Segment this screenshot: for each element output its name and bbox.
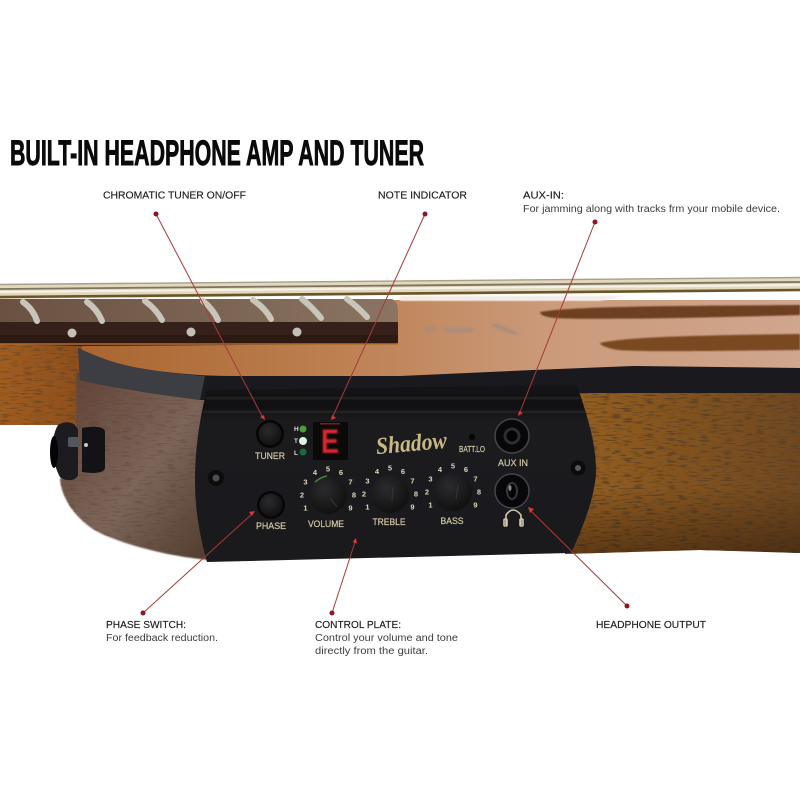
fretboard bbox=[0, 299, 398, 346]
phase button bbox=[256, 491, 286, 532]
treble knob: 5 bbox=[388, 464, 392, 472]
aux in jack: AUX IN bbox=[498, 458, 528, 469]
tuner LEDs bbox=[294, 426, 307, 457]
label: control plate: directly from the guitar. bbox=[315, 646, 428, 657]
treble knob: 4 bbox=[375, 467, 380, 476]
volume knob: 2 bbox=[300, 490, 304, 500]
screw right bbox=[570, 460, 586, 476]
bass knob: 6 bbox=[464, 465, 468, 474]
arrow: control plate bbox=[330, 538, 357, 616]
volume knob: 6 bbox=[339, 468, 343, 477]
title: BUILT-IN HEADPHONE AMP AND TUNER bbox=[10, 134, 424, 173]
treble knob: TREBLE bbox=[372, 517, 406, 528]
label: control plate: CONTROL PLATE: bbox=[315, 619, 401, 631]
label: phase switch: For feedback reduction. bbox=[106, 633, 218, 644]
label: control plate: Control your volume and tone bbox=[315, 633, 458, 644]
volume knob bbox=[300, 464, 356, 530]
volume knob: 8 bbox=[352, 490, 356, 500]
tuner LEDs: H bbox=[294, 426, 299, 433]
tuner button: TUNER bbox=[255, 451, 285, 462]
label: phase switch bbox=[106, 619, 218, 644]
label: aux in: AUX-IN: bbox=[523, 190, 564, 202]
volume knob: 7 bbox=[348, 478, 353, 486]
guitar photograph bbox=[0, 277, 800, 560]
panel: control plate bbox=[195, 385, 596, 562]
icon: headphones bbox=[504, 510, 523, 526]
bass knob: 3 bbox=[428, 474, 433, 484]
bass knob bbox=[425, 462, 481, 527]
walnut side wood bbox=[60, 372, 210, 560]
label: aux in: For jamming along with tracks frm your mobile device. bbox=[523, 204, 780, 215]
volume knob: VOLUME bbox=[308, 519, 344, 530]
note display bbox=[313, 422, 348, 461]
volume knob: 3 bbox=[303, 478, 308, 486]
tuner button bbox=[255, 420, 285, 462]
guitar top wood bbox=[78, 296, 800, 385]
bass knob: 4 bbox=[438, 465, 443, 474]
bass knob: 2 bbox=[425, 488, 429, 496]
strap button bbox=[50, 422, 105, 480]
bass knob: BASS bbox=[440, 516, 464, 527]
label: aux in bbox=[523, 190, 780, 215]
treble knob: 9 bbox=[410, 502, 415, 512]
frets bbox=[23, 299, 367, 321]
bass knob: 8 bbox=[477, 488, 481, 496]
bass knob: 9 bbox=[473, 500, 478, 510]
note display: E bbox=[321, 423, 339, 461]
label: chromatic tuner: CHROMATIC TUNER ON/OFF bbox=[103, 190, 246, 202]
bass knob: 1 bbox=[428, 500, 433, 510]
phase button: PHASE bbox=[256, 521, 286, 532]
treble knob: 3 bbox=[365, 476, 370, 486]
bass knob: 5 bbox=[451, 462, 455, 470]
treble knob: 6 bbox=[401, 467, 405, 476]
walnut side wood right bbox=[565, 390, 800, 554]
arrow: tuner bbox=[154, 212, 265, 420]
treble knob: 8 bbox=[414, 490, 418, 498]
volume knob: 9 bbox=[348, 504, 353, 512]
treble knob: 2 bbox=[362, 490, 366, 498]
battery indicator: BATT.LO bbox=[459, 445, 485, 454]
volume knob: 4 bbox=[313, 468, 318, 477]
aux in jack bbox=[495, 419, 529, 469]
tuner LEDs: L bbox=[294, 450, 298, 457]
bass knob: 7 bbox=[473, 474, 478, 484]
treble knob: 7 bbox=[410, 476, 415, 486]
label: note indicator: NOTE INDICATOR bbox=[378, 190, 467, 202]
heel wood bbox=[0, 344, 82, 425]
arrow: headphone bbox=[528, 507, 630, 608]
treble knob bbox=[362, 464, 418, 528]
label: phase switch: PHASE SWITCH: bbox=[106, 619, 186, 631]
treble knob: 1 bbox=[365, 502, 370, 512]
arrow: note indicator bbox=[331, 212, 428, 420]
label: headphone output: HEADPHONE OUTPUT bbox=[596, 619, 707, 631]
arrow: aux in bbox=[518, 220, 598, 416]
black binding bbox=[78, 348, 800, 400]
battery indicator bbox=[459, 434, 485, 454]
arrow: phase bbox=[140, 511, 255, 616]
headphone jack bbox=[495, 474, 529, 508]
fret markers bbox=[68, 328, 302, 338]
tuner LEDs: T bbox=[294, 438, 298, 445]
label: control plate bbox=[315, 619, 458, 657]
screw left bbox=[208, 470, 224, 486]
Shadow logo: Shadow bbox=[375, 428, 449, 460]
volume knob: 1 bbox=[303, 504, 308, 512]
strings bbox=[0, 277, 800, 299]
volume knob: 5 bbox=[326, 464, 330, 474]
